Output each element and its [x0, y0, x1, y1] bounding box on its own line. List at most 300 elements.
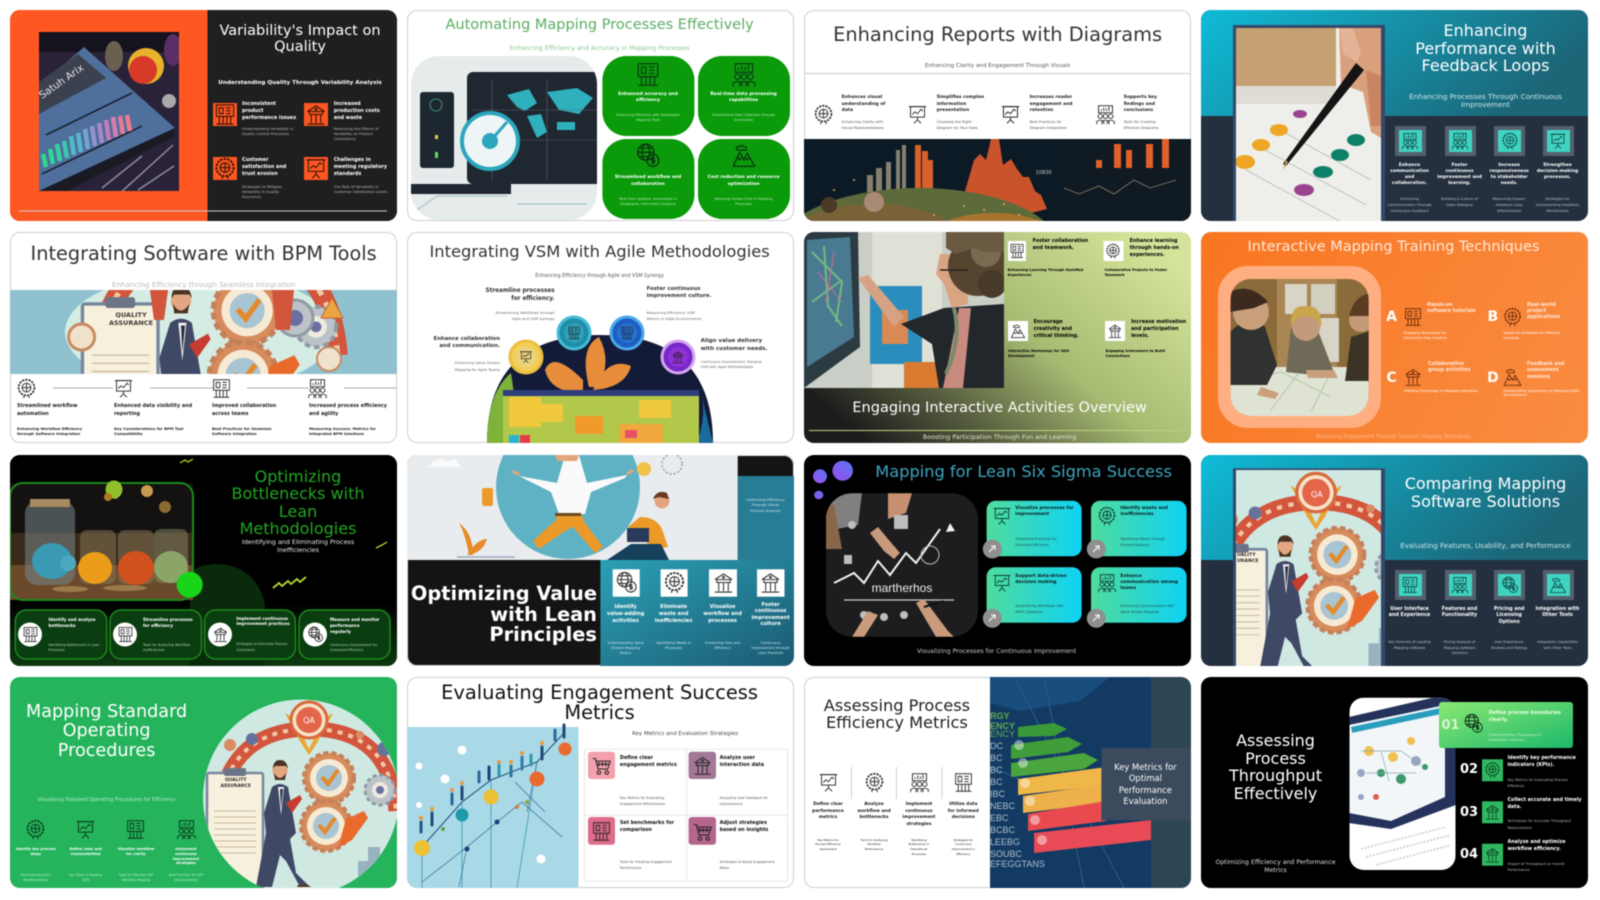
caption: Feedback Loop: [1496, 202, 1523, 206]
caption: Diagram Integration: [1030, 126, 1067, 130]
caption: Processes: [665, 646, 682, 650]
caption: Continuous: [761, 641, 780, 645]
text: pricing: Licensing: [1496, 613, 1522, 618]
image: quality assurance banner: QUALITY: [115, 311, 147, 319]
caption: Enhancing Flow and: [705, 641, 740, 645]
text: group activities: [1428, 362, 1470, 375]
image: dome with board and ring icons: [407, 232, 794, 443]
caption: Strategies for: [1545, 196, 1570, 200]
text: foster culture: Foster continuous: [647, 286, 700, 292]
title: Enhancing Reports with Diagrams: [833, 23, 1162, 46]
text: communication: teams: [1120, 586, 1136, 591]
title: Enhancing: [1444, 21, 1527, 40]
caption: Impact of Throughput on Overall: [1508, 862, 1565, 866]
caption: Effective Diagrams: [1124, 126, 1159, 130]
caption: Constraints: [236, 648, 255, 652]
image: energy rating arrows: ENCY: [990, 721, 1015, 731]
caption: Key Metrics for Evaluating Process: [1508, 778, 1568, 782]
caption: [1106, 348, 1165, 359]
text: align value: Align value delivery: [701, 338, 762, 344]
caption: Interactive Workshops for Skill: [1008, 348, 1069, 352]
caption: Tools for Tracking Engagement: [620, 860, 672, 864]
caption: Key Steps in Mapping: [69, 872, 102, 876]
caption: Integration Capabilities: [1537, 640, 1578, 644]
caption: [705, 641, 740, 651]
caption: Key Metrics for Evaluating: [620, 796, 664, 800]
caption: Understanding SOP: [21, 872, 51, 876]
text: feedback sessions: Feedback and: [1527, 362, 1564, 367]
caption: Identifying Waste Through: [1120, 536, 1165, 540]
text: inconsistent performance: product: [242, 108, 264, 114]
caption: Visualizing Processes for: [1015, 536, 1057, 540]
text: workflow: bottlenecks: [859, 815, 889, 820]
text: continuous culture: improvement: [751, 615, 790, 621]
icon: process steps: [25, 819, 46, 840]
panel: Automating Mapping Processes Effectively: [407, 10, 794, 220]
caption: Improved Efficiency: [1015, 542, 1049, 546]
caption: Sustained Efficiency: [330, 648, 363, 652]
caption: [860, 838, 887, 852]
text: visualize: Visualize processes for: [1015, 506, 1074, 510]
text: metrics: Define clear: [813, 802, 843, 807]
caption: Streamlining Data Collection through: [712, 113, 775, 117]
text: group activities: group activities: [1428, 368, 1470, 373]
text: improvement: strategies: [176, 861, 196, 865]
sidebar caption: Through Visual: [752, 503, 779, 507]
caption: [212, 426, 272, 437]
caption: Understanding Throughput in: [1489, 733, 1542, 737]
caption: Engaging Techniques for: [1404, 331, 1446, 335]
caption: [143, 642, 190, 652]
icon: continuous culture: [759, 571, 782, 594]
icon: visibility: [113, 378, 134, 399]
caption: Mapping for Agile Teams: [455, 368, 500, 372]
caption: [17, 426, 82, 437]
panel: Mapping Standard Operating Procedures: [10, 677, 397, 888]
image: chalkboard with hands and growth arrow: [812, 460, 1188, 638]
text: regulatory standards: standards: [334, 171, 361, 177]
caption: Performance: [1508, 868, 1530, 872]
text: benchmarks: comparison: [620, 827, 652, 833]
subtitle: Improvement: [1461, 100, 1510, 109]
subtitle: Metrics: [1264, 867, 1287, 874]
caption: [455, 360, 500, 374]
title: [1415, 21, 1556, 76]
icon: value-adding: [615, 571, 638, 594]
letter D: D: [1487, 370, 1499, 386]
panel: Optimizing Value with Lean Principles: [407, 455, 794, 666]
text: workflow: [614, 174, 682, 187]
text: visualize: [118, 847, 154, 858]
text: features: Features and: [1442, 607, 1477, 612]
title: Engaging Interactive Activities Overview: [852, 400, 1147, 416]
text: KPIs: indicators (KPIs).: [1508, 763, 1554, 768]
caption: [936, 120, 978, 130]
caption: Variability on Product: [334, 132, 373, 136]
caption: [242, 185, 282, 199]
caption: Value Stream Mapping: [1120, 610, 1159, 614]
text: visualize: improvement: [1015, 512, 1049, 517]
panel: Integrating VSM with Agile Methodologies: [407, 232, 794, 443]
text: key findings: findings and: [1124, 102, 1155, 106]
caption: Efficiency: [714, 646, 731, 650]
text: regulatory standards: meeting regulatory: [334, 164, 387, 170]
text: cost reduction: optimization: [728, 182, 760, 187]
text: continuous improvement: [1437, 162, 1482, 188]
text: customer satisfaction: trust erosion: [242, 171, 278, 177]
caption: Tools for Effective SOP: [119, 872, 153, 876]
text: visual understanding: [841, 94, 886, 113]
subtitle: Enhancing Efficiency through Agile and VSM Synergy: [535, 273, 664, 279]
text: data: Utilize data: [949, 802, 977, 807]
callout text: Optimal: [1129, 773, 1162, 783]
text: visibility: Enhanced data visibility and: [114, 403, 192, 409]
text: collaboration: Foster collaboration: [1033, 238, 1088, 244]
text: eliminate waste: inefficiencies: [655, 618, 692, 624]
text: workflow efficiency: workflow efficiency.: [1508, 847, 1561, 852]
title: [441, 682, 758, 724]
caption: Development: [1008, 354, 1034, 358]
caption: [1444, 640, 1475, 657]
subtitle: Key Metrics and Evaluation Strategies: [632, 730, 738, 736]
caption: [242, 127, 294, 136]
label in chart: 10830: [1036, 170, 1052, 176]
subtitle: Inefficiencies: [277, 546, 319, 554]
image: woman pointing at a map screen: [804, 232, 1191, 443]
text: responsiveness: responsiveness: [1490, 169, 1529, 174]
caption: Software Integration: [212, 431, 257, 436]
text: data-driven: Support data-driven: [1015, 574, 1067, 578]
caption: [1123, 120, 1159, 130]
title: Variability's Impact on: [219, 23, 381, 39]
text: value-adding: value-adding: [607, 610, 644, 616]
caption: [114, 426, 183, 437]
text: visualize: [1015, 506, 1074, 518]
title: Metrics: [564, 701, 635, 724]
caption: Pricing Analysis of: [1444, 640, 1475, 644]
caption: [1504, 331, 1560, 341]
caption: [712, 113, 776, 122]
icon: collaboration: [211, 378, 232, 399]
icon: shop: [692, 755, 713, 776]
text: KPIs: [1508, 755, 1576, 769]
caption: Quality Control Processes: [242, 132, 289, 136]
icon: continuous improvement: [212, 626, 229, 643]
title: Evaluating Engagement Success: [441, 680, 758, 704]
icon: feedback sessions: [1502, 367, 1522, 387]
caption: Improvement in: [952, 847, 975, 851]
title: [1405, 475, 1566, 510]
image: quality assurance banner: ASSURANCE: [109, 319, 153, 327]
text: key findings: conclusions: [1124, 108, 1153, 113]
text: motivation: [1131, 319, 1186, 340]
icon: decision making: [1548, 132, 1566, 150]
subtitle: Visualizing Processes for Continuous Improvement: [917, 648, 1076, 655]
text: KPIs: Identify key performance: [1508, 756, 1576, 761]
caption: Mapping Software: [1444, 646, 1475, 650]
text: decision making: Strengthen: [1543, 162, 1572, 168]
icon: cart 2: [692, 821, 713, 842]
caption: Measuring Impact:: [1492, 196, 1526, 200]
letter B: B: [1488, 309, 1498, 325]
text: engagement metrics: [620, 754, 677, 768]
image: quality assurance illustration: URANCE: [1236, 558, 1258, 564]
text: complex information: presentation: [937, 108, 969, 113]
image: energy rating arrows: ENCY: [990, 729, 1015, 739]
icon: improvement: [176, 819, 197, 840]
text: project applications: applications: [1527, 315, 1560, 320]
text: align value: with customer needs.: [701, 346, 768, 352]
text: data: for informed: [948, 809, 979, 814]
text: bottlenecks: bottlenecks: [48, 623, 76, 628]
text: inconsistent performance: Inconsistent: [242, 101, 276, 107]
icon: cart: [591, 755, 612, 776]
caption: [909, 838, 929, 856]
title: Optimizing Value: [411, 582, 597, 605]
text: regulatory standards: Challenges in: [334, 157, 371, 163]
text: responsiveness: Increase: [1498, 162, 1520, 168]
text: user interface: and Experience: [1389, 613, 1430, 618]
subtitle: Optimizing Efficiency and Performance: [1215, 859, 1336, 866]
caption: Enhancing Clarity with: [842, 120, 883, 124]
icon: document: [591, 821, 612, 842]
text: responsiveness: needs.: [1501, 181, 1518, 186]
text: improvement: continuous: [905, 809, 933, 814]
text: production costs: production costs: [334, 108, 380, 114]
image: tablet with colourful bar chart: Satuh Arix: [37, 62, 86, 101]
image: quality assurance banner: [10, 232, 397, 443]
icon: communication: [1401, 132, 1419, 150]
text: cost reduction: [707, 174, 780, 187]
text: process steps: Identify key process: [16, 847, 56, 851]
title: [1229, 732, 1322, 802]
text: reader engagement: Increases reader: [1030, 95, 1072, 100]
icon: bottlenecks: [22, 626, 39, 643]
letter A: A: [1386, 309, 1397, 325]
text: automation: automation: [17, 411, 49, 417]
icon: project applications: [1502, 307, 1522, 327]
text: visualize workflow: Visualize: [710, 604, 735, 610]
number 02: 02: [1460, 762, 1478, 776]
text: eliminate waste: [655, 604, 692, 624]
text: monitor performance: performance: [330, 623, 359, 628]
caption: Building a Culture of: [1441, 196, 1478, 200]
text: collaboration: and teamwork.: [1033, 245, 1074, 251]
caption: [1105, 268, 1167, 279]
text: data: decisions: [952, 815, 975, 820]
title: Interactive Mapping Training Techniques: [1248, 239, 1539, 255]
text: streamline: for efficiency: [143, 623, 173, 628]
title: Performance with: [1415, 39, 1556, 58]
icon: collaboration: [1009, 243, 1025, 259]
text: feedback sessions: [1527, 362, 1564, 381]
icon: roles: [75, 819, 96, 840]
caption: The Role of Variability in: [334, 185, 378, 189]
caption: Efficiency: [1508, 784, 1524, 788]
caption: Processes: [735, 202, 752, 206]
subtitle: [1409, 92, 1562, 109]
caption: Collaborative Projects to Foster: [1105, 268, 1167, 272]
caption: Bottlenecks in: [909, 842, 929, 846]
caption: Key Features of Leading: [1389, 640, 1430, 644]
caption: [616, 113, 680, 122]
text: inconsistent performance: [242, 100, 297, 121]
caption: VSM with Agile Methodologies: [701, 365, 753, 369]
text: data collection: [1508, 796, 1582, 811]
icon: visual understanding: [814, 104, 833, 125]
text: streamline: [486, 286, 555, 303]
title: Efficiency Metrics: [826, 713, 968, 732]
image: monitor with world map and gauge: [410, 55, 791, 220]
text: communication: Enhance: [1120, 574, 1142, 578]
image: quality assurance illustration: QA: [1310, 490, 1323, 499]
text: communication: collaboration.: [1392, 181, 1427, 186]
subtitle: Boosting Participation Through Fun and Learning: [923, 434, 1076, 441]
text: metrics: metrics: [819, 815, 837, 820]
caption: [618, 196, 678, 206]
text: workflow: [857, 802, 891, 822]
image: energy rating arrows: BC: [990, 765, 1003, 775]
text: pricing: [1494, 607, 1524, 626]
text: visualize workflow: [703, 604, 742, 624]
subtitle: Enhancing Efficiency through Seamless Integration: [112, 280, 295, 289]
text: continuous improvement: improvement and: [1437, 175, 1482, 180]
icon: continuous improvement: [1450, 132, 1468, 150]
subtitle: Enhancing Processes Through Continuous: [1409, 92, 1562, 100]
text: customer satisfaction: satisfaction and: [242, 164, 286, 170]
panel: Engaging Interactive Activities Overview: [804, 232, 1191, 443]
title: Assessing Process: [824, 696, 970, 715]
title: Integrating VSM with Agile Methodologies: [429, 242, 770, 261]
icon: workflow: [864, 772, 885, 793]
text: engagement metrics: Define clear: [620, 754, 653, 760]
image: quality assurance illustration: [1200, 455, 1588, 666]
text: integration: [1536, 607, 1579, 620]
title: Lean: [279, 502, 317, 521]
caption: [751, 641, 790, 657]
image: data landscape: [803, 72, 1192, 222]
image: quality assurance illustration in a circle: ASSURANCE: [220, 783, 251, 789]
caption: Workflow Mapping: [122, 878, 150, 882]
caption: Metrics in Agile Environments: [647, 317, 702, 321]
caption: Processes: [48, 648, 65, 652]
image: quality assurance illustration in a circle: QA: [303, 716, 315, 725]
caption: [330, 642, 377, 654]
subtitle: Enhancing Efficiency and Accuracy in Mapping Processes: [510, 45, 689, 52]
title: with Lean: [490, 603, 597, 626]
text: visibility: reporting: [114, 411, 140, 417]
caption: Best Practices for Seamless: [212, 426, 272, 430]
text: improvement: [902, 802, 935, 828]
text: visual understanding: Enhances visual: [842, 95, 882, 100]
caption: [1120, 603, 1174, 615]
panel: Evaluating Engagement Success Metrics: [407, 677, 794, 888]
text: process steps: [16, 847, 56, 858]
title: Automating Mapping Processes Effectively: [445, 17, 754, 33]
text: communication: [1120, 574, 1178, 592]
title: [411, 584, 597, 646]
text: reader engagement: retention: [1030, 108, 1053, 113]
subtitle: Visualizing Standard Operating Procedures for Efficiency: [38, 797, 176, 803]
text: interaction data: [720, 754, 764, 768]
number 04: 04: [1460, 847, 1478, 862]
caption: Strategies to Eliminate Process: [236, 642, 287, 646]
caption: User Experience:: [1494, 640, 1524, 644]
image: piggy banks in glass jars: [10, 455, 397, 666]
text: project applications: [1527, 302, 1560, 322]
caption: Continuous: [955, 842, 971, 846]
text: group activities: Collaborative: [1428, 362, 1464, 367]
panel: Mapping for Lean Six Sigma Success: [804, 455, 1191, 666]
caption: Integrated BPM Solutions: [309, 431, 364, 436]
caption: Effectiveness: [1497, 208, 1521, 212]
caption: Workflow: [867, 842, 881, 846]
icon: key findings: [1096, 104, 1116, 125]
caption: Analyzing User Feedback for: [720, 796, 768, 800]
caption: Continuous Improvement for: [330, 642, 377, 646]
icon: data: [953, 772, 974, 793]
text: continuous improvement: learning.: [1448, 181, 1471, 186]
caption: Streamlining Workflows through: [495, 310, 555, 314]
text: adjust strategies: [720, 820, 768, 834]
icon: automation: [16, 378, 37, 399]
text: improvement: improvement: [902, 815, 935, 820]
image: energy rating arrows: LEEBG: [990, 837, 1020, 847]
image: energy rating arrows: IBC: [990, 789, 1005, 799]
title: Effectively: [1234, 784, 1317, 803]
icon: tutorials: [1402, 307, 1422, 327]
icon: item 2: [304, 102, 328, 126]
caption: [309, 426, 376, 437]
text: collaboration: and communication.: [439, 343, 500, 349]
text: waste: Identify waste and: [1120, 506, 1168, 510]
image: quality assurance illustration in a circle: QUALITY: [225, 777, 247, 783]
caption: [236, 642, 287, 653]
caption: Measurement: [1508, 826, 1532, 830]
text: project applications: project: [1527, 309, 1546, 314]
image: energy rating arrows: BC: [990, 753, 1003, 763]
caption: Continuous Improvement: Merging: [701, 360, 762, 364]
text: creativity: Encourage: [1034, 319, 1063, 325]
text: collaboration: [1033, 238, 1088, 252]
icon: data collection: [1484, 803, 1500, 821]
caption: [1387, 196, 1432, 214]
text: agility: and agility: [309, 411, 338, 417]
caption: [1015, 603, 1064, 615]
text: visualize workflow: processes: [708, 618, 737, 624]
caption: Workflow Basics: [23, 878, 48, 882]
image: energy rating arrows: SOUBC: [990, 849, 1022, 859]
subtitle: Enhancing Engagement Through Dynamic Mapping Techniques: [1316, 434, 1471, 440]
caption: Assurance: [242, 195, 261, 199]
caption: Enhancing Learning Through Gamified: [1008, 268, 1083, 272]
icon: motivation: [1107, 323, 1123, 339]
text: communication: and: [1405, 175, 1414, 180]
text: streamline: [143, 617, 193, 629]
text: engagement metrics: engagement metrics: [620, 762, 677, 768]
caption: Strategies for: [953, 838, 973, 842]
panel: Enhancing Performance with Feedback Loops: [1200, 10, 1588, 220]
text: interaction data: interaction data: [720, 762, 764, 768]
image: quality assurance illustration in a circle: [202, 698, 398, 889]
text: visualize workflow: workflow and: [703, 610, 742, 616]
caption: Assessment: [819, 847, 837, 851]
text: communication: Enhance: [1399, 162, 1420, 168]
text: continuous improvement: [236, 616, 290, 626]
caption: Stream Mapping: [611, 646, 640, 650]
text: workflow: Streamlined workflow and: [615, 175, 681, 180]
letter C: C: [1386, 370, 1397, 386]
